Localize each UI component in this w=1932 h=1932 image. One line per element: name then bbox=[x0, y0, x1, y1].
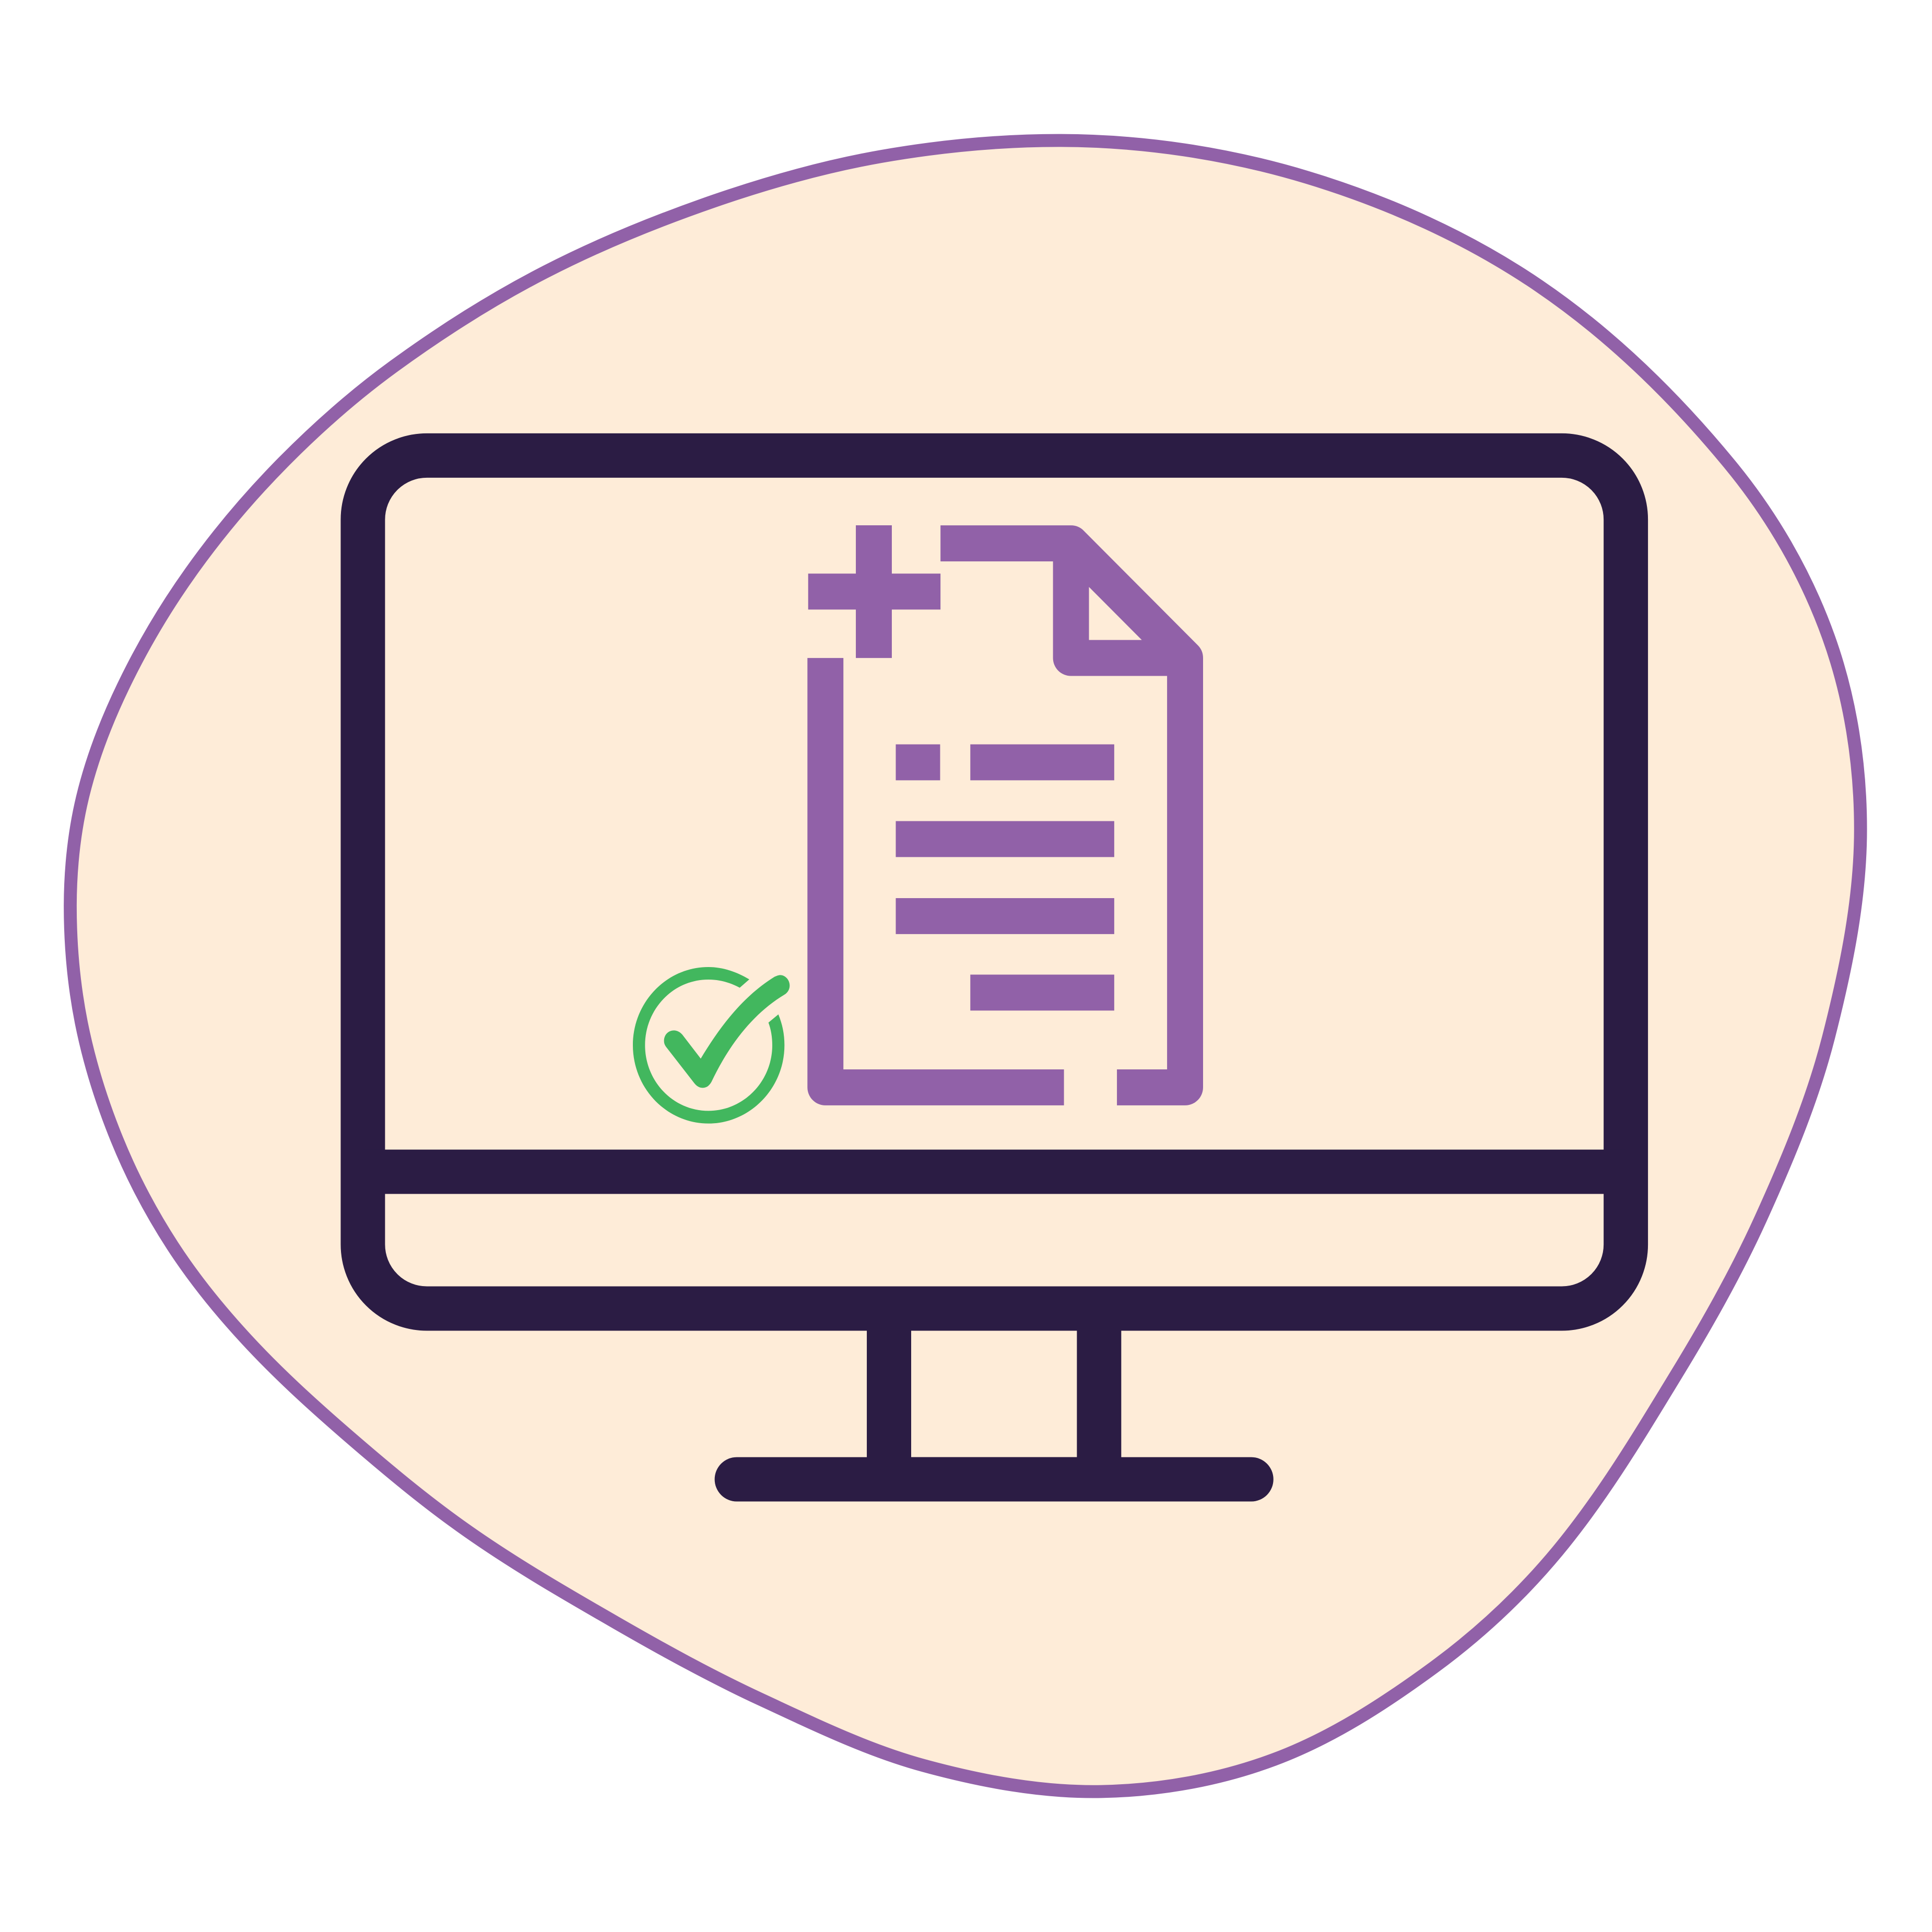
monitor chin divider bbox=[363, 1162, 1626, 1181]
monitor frame bbox=[363, 455, 1626, 1309]
document outline bbox=[826, 544, 1185, 1087]
folded corner bbox=[1071, 544, 1185, 658]
background blob bbox=[70, 140, 1860, 1792]
monitor base bbox=[737, 1470, 1251, 1489]
document text lines bbox=[896, 762, 1114, 993]
plus sign bbox=[808, 525, 940, 658]
icon: green check mark bbox=[633, 967, 790, 1124]
monitor stand bbox=[889, 1309, 1099, 1479]
icon: document with plus sign bbox=[808, 525, 1185, 1087]
icon: desktop monitor bbox=[363, 455, 1626, 1479]
check ring bbox=[633, 967, 784, 1124]
check tick bbox=[664, 975, 790, 1088]
